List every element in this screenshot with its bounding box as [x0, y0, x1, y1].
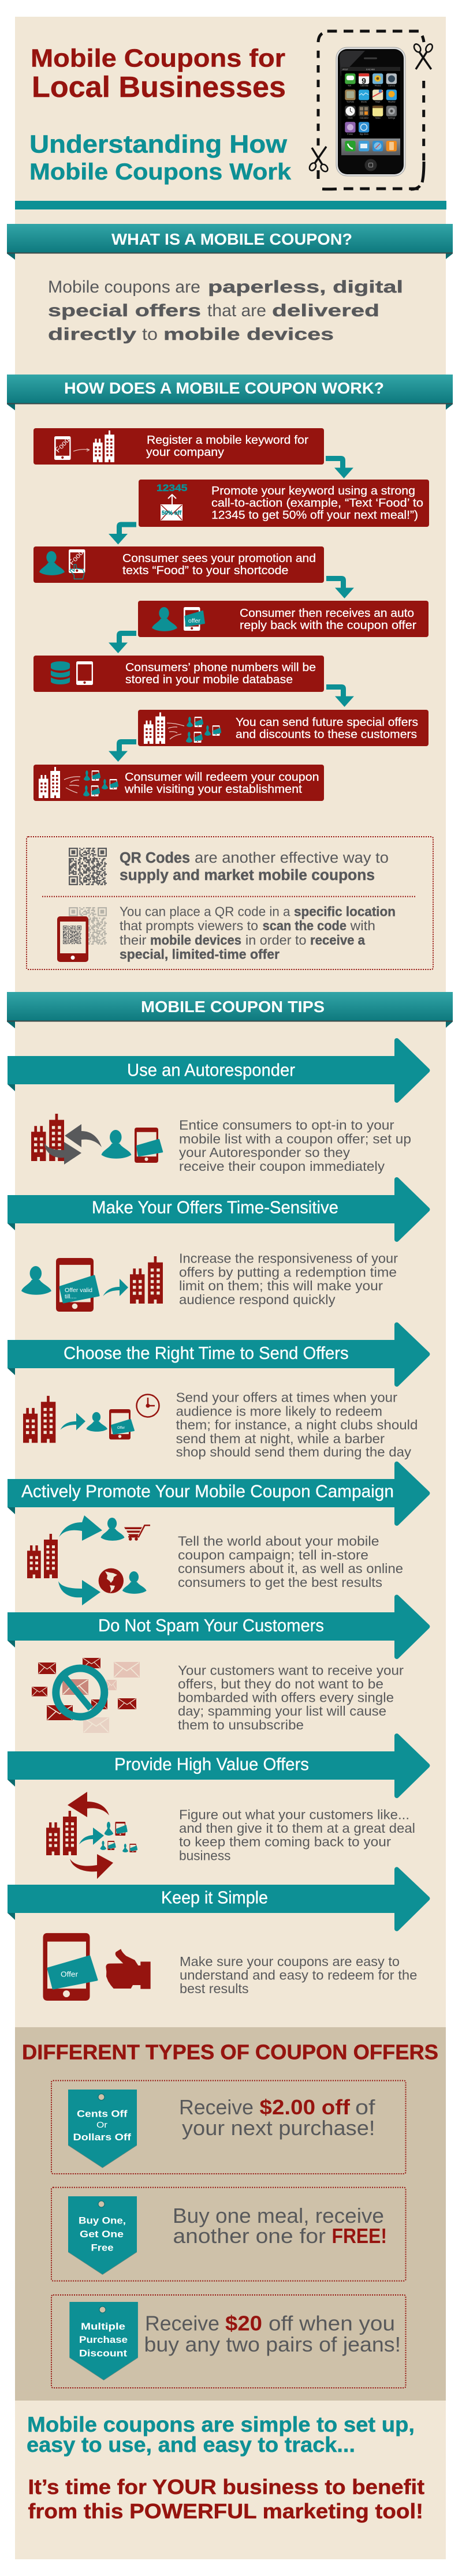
icon: scissors lower left	[308, 147, 329, 173]
ribbon: what is a mobile coupon	[7, 224, 453, 260]
step 7: while visiting your establishment	[124, 782, 302, 796]
text block: QR code placement: specific location	[294, 904, 396, 919]
banner arrow: provide high value offers	[8, 1736, 427, 1796]
text block: QR codes intro: are another effective way to	[195, 850, 389, 866]
step 3: Consumer sees your promotion and	[122, 552, 316, 565]
icon: timed offer with clock	[23, 1394, 159, 1443]
step 4: reply back with the coupon offer	[240, 619, 416, 632]
step 1	[33, 428, 324, 465]
text: two dollars off: of	[355, 2095, 376, 2119]
text block: actively promote: coupon campaign; tell in-store	[178, 1548, 368, 1563]
tag: buy one get one: Buy One,	[79, 2216, 126, 2226]
text: twenty dollars off: off when you	[269, 2312, 395, 2335]
text block: QR code placement: in order to	[245, 933, 307, 948]
icon: consumer receives offer	[152, 607, 204, 631]
step 2: Promote your keyword using a strong	[211, 484, 415, 497]
icon: smartphone	[336, 47, 405, 176]
icon: simple offer and thumbs up	[43, 1933, 151, 2001]
icon: smartphone: Clock	[348, 117, 353, 119]
icon: smartphone: Weather	[388, 100, 396, 103]
text block: right time: Send your offers at times when your	[176, 1390, 397, 1405]
text: buy one meal: Buy one meal, receive	[173, 2204, 384, 2227]
text block: keep it simple: understand and easy to redeem for the	[180, 1968, 417, 1983]
step 7	[33, 765, 324, 801]
text block: QR code placement	[120, 904, 396, 961]
closing text: simple to set up	[27, 2413, 415, 2457]
icon: shortcode envelope	[157, 482, 187, 521]
ribbon: mobile coupon tips: MOBILE COUPON TIPS	[141, 998, 325, 1016]
icon: time-limited offer: Offer valid	[65, 1287, 92, 1294]
ribbon: what is a mobile coupon: WHAT IS A MOBILE COUPON?	[111, 230, 352, 248]
tag: multiple purchase discount: Discount	[79, 2349, 128, 2359]
icon: smartphone: Maps	[375, 100, 381, 103]
step 3	[33, 546, 324, 583]
ribbon: how does a mobile coupon work: HOW DOES A MOBILE COUPON WORK?	[64, 379, 384, 397]
arrow: step 2 to 3	[109, 522, 136, 545]
text block: mobile coupon definition: that are	[207, 301, 266, 320]
icon: smartphone: AT&T	[342, 68, 348, 70]
icon: autoresponder exchange	[31, 1114, 162, 1165]
text block: autoresponder: mobile list with a coupon offer; set up	[179, 1131, 411, 1146]
icon: consumer receives offer: offer	[188, 617, 200, 624]
icon: shortcode envelope: 12345	[157, 482, 187, 493]
icon: thumbs up	[106, 1949, 151, 1989]
tag: buy one get one	[68, 2196, 137, 2275]
text block: right time: them; for instance, a night clubs should	[176, 1417, 418, 1432]
text block: mobile coupon definition: delivered	[272, 301, 379, 320]
icon: customers visit business	[39, 767, 118, 798]
text block: QR code placement: their	[120, 933, 147, 948]
text block: actively promote: Tell the world about your mobile	[178, 1534, 379, 1549]
dashed coupon cut line with scissors	[308, 31, 434, 189]
step 2: 12345 to get 50% off your next meal!”)	[211, 508, 418, 522]
banner arrow: keep it simple: Keep it Simple	[161, 1888, 268, 1907]
step 3: texts “Food” to your shortcode	[122, 564, 289, 577]
text: twenty dollars off	[144, 2312, 401, 2356]
text block: autoresponder: Entice consumers to opt-in to your	[179, 1118, 394, 1133]
icon: consumer texting: Food	[67, 548, 85, 567]
panel: different types of coupon offers	[15, 2027, 446, 2401]
arrow: step 5 to 6	[326, 684, 354, 707]
icon: timed offer with clock: Offer	[117, 1426, 125, 1430]
step 1: Register a mobile keyword for	[147, 433, 308, 447]
icon: smartphone: Photos	[375, 84, 381, 87]
text block: autoresponder: your Autoresponder so they	[179, 1145, 350, 1160]
text: two dollars off: Receive	[179, 2095, 254, 2119]
text block: QR code placement: mobile devices	[150, 933, 241, 948]
arrow: step 6 to 7	[109, 739, 136, 762]
step 5: Consumers’ phone numbers will be	[125, 661, 316, 674]
offer: buy one get one free	[51, 2188, 405, 2281]
text block: QR codes intro	[120, 850, 389, 883]
text block: mobile coupon definition: mobile devices	[163, 325, 334, 344]
text block: keep it simple: Make sure your coupons are easy to	[180, 1954, 400, 1969]
step 4: Consumer then receives an auto	[240, 606, 414, 620]
banner arrow: actively promote: Actively Promote Your Mobile Coupon Campaign	[21, 1482, 394, 1502]
step 2	[139, 480, 429, 527]
text block: high value offers: Figure out what your customers like...	[179, 1807, 409, 1822]
icon: smartphone: iTunes	[347, 133, 353, 135]
text block: autoresponder: receive their coupon immediately	[179, 1159, 385, 1174]
text block: actively promote	[178, 1534, 403, 1590]
text block: time-sensitive: offers by putting a redemption time	[179, 1265, 397, 1280]
icon: smartphone: Notes	[375, 117, 381, 119]
icon: time-limited offer: till....	[65, 1294, 77, 1300]
icon: smartphone: Camera	[388, 84, 395, 87]
panel: QR codes	[27, 837, 433, 969]
text block: do not spam: bombarded with offers every single	[178, 1690, 394, 1705]
icon: smartphone: 9:42 AM	[366, 68, 375, 70]
step 5: stored in your mobile database	[125, 673, 293, 686]
tag: cents off: Cents Off	[77, 2109, 128, 2119]
text block: mobile coupon definition: directly	[48, 325, 136, 344]
banner arrow: choose the right time	[8, 1325, 427, 1384]
icon: smartphone: App Store	[360, 133, 368, 135]
text block: time-sensitive: limit on them; this will make your	[179, 1278, 383, 1293]
icon: high value offer cycle	[46, 1792, 137, 1879]
ribbon: mobile coupon tips	[7, 992, 453, 1028]
text block: mobile coupon definition: to	[142, 325, 158, 344]
heading: coupon types: DIFFERENT TYPES OF COUPON OFFERS	[22, 2040, 438, 2064]
banner arrow: make your offers time-sensitive	[8, 1180, 427, 1240]
icon: business sends offers to customers	[144, 712, 221, 744]
banner arrow: provide high value offers: Provide High Value Offers	[114, 1755, 309, 1774]
text block: actively promote: consumers to get the best results	[178, 1575, 382, 1590]
icon: smartphone: Settings	[388, 117, 396, 119]
banner arrow: keep it simple	[8, 1869, 427, 1929]
tag: multiple purchase discount: Multiple	[81, 2322, 125, 2332]
closing text: simple to set up: easy to use, and easy to track...	[27, 2433, 355, 2457]
banner arrow: do not spam: Do Not Spam Your Customers	[98, 1616, 324, 1635]
offer: cents off	[51, 2081, 405, 2174]
text block: actively promote: consumers about it, as well as online	[178, 1561, 403, 1576]
banner arrow: actively promote	[8, 1464, 427, 1523]
text block: high value offers: business	[179, 1848, 231, 1863]
tag: buy one get one: Free	[91, 2243, 113, 2253]
icon: phone to business: Food	[53, 436, 71, 454]
icon: time-limited offer	[21, 1256, 163, 1312]
text: buy one meal	[173, 2204, 387, 2248]
icon: smartphone: Stocks	[361, 100, 367, 103]
text block: QR code placement: You can place a QR code in a	[120, 904, 290, 919]
tag: cents off: Dollars Off	[73, 2132, 132, 2143]
closing text: call to action	[28, 2475, 424, 2523]
text block: QR code placement: scan the code	[263, 918, 346, 933]
text block: mobile coupon definition: paperless, digital	[208, 278, 403, 297]
tag: multiple purchase discount: Purchase	[79, 2335, 128, 2345]
text block: do not spam	[178, 1663, 404, 1732]
text block: mobile coupon definition: Mobile coupons are	[48, 278, 200, 297]
icon: QR code	[69, 848, 107, 885]
text block: QR codes intro: supply and market mobile coupons	[120, 867, 375, 883]
subtitle: Mobile Coupons Work	[29, 159, 292, 185]
offer: multiple purchase discount	[51, 2295, 405, 2388]
text block: high value offers: and then give it to them at a great deal	[179, 1821, 415, 1836]
text block: mobile coupon definition	[48, 278, 403, 344]
closing text: call to action: It’s time for YOUR business to benefit	[28, 2475, 424, 2499]
text block: time-sensitive: Increase the responsiveness of your	[179, 1251, 398, 1266]
text block: autoresponder	[179, 1118, 411, 1174]
text block: right time: shop should send them during the day	[176, 1444, 411, 1459]
text block: keep it simple: best results	[180, 1981, 249, 1996]
title: Mobile Coupons for	[31, 44, 285, 73]
subtitle	[29, 130, 292, 185]
icon: phone to business	[53, 430, 114, 462]
text block: high value offers: to keep them coming back to your	[179, 1834, 391, 1849]
step 4	[138, 601, 429, 637]
icon: no spam envelopes	[32, 1658, 140, 1733]
icon: globe	[99, 1568, 124, 1593]
text block: do not spam: day; spamming your list will cause	[178, 1703, 386, 1718]
arrow: step 3 to 4	[326, 576, 354, 598]
text block: do not spam: offers, but they do not want to be	[178, 1676, 383, 1691]
text block: time-sensitive: audience respond quickly	[179, 1292, 336, 1307]
text block: mobile coupon definition: special offers	[48, 301, 201, 320]
icon: smartphone: Calendar	[360, 84, 369, 87]
icon: smartphone: 9	[362, 76, 366, 85]
step 6: and discounts to these customers	[236, 728, 417, 741]
icon: smartphone: Text	[348, 84, 351, 87]
text: two dollars off: $2.00 off	[260, 2095, 351, 2119]
text block: time-sensitive	[179, 1251, 398, 1307]
text: two dollars off	[179, 2095, 376, 2140]
banner arrow: choose the right time: Choose the Right Time to Send Offers	[64, 1343, 349, 1363]
step 6: You can send future special offers	[236, 716, 418, 729]
text block: do not spam: Your customers want to receive your	[178, 1663, 404, 1678]
tag: multiple purchase discount	[69, 2302, 138, 2380]
icon: scissors top right	[413, 43, 434, 69]
text block: right time	[176, 1390, 418, 1459]
icon: smartphone: YouTube	[346, 100, 354, 103]
closing text: simple to set up: Mobile coupons are simple to set up,	[27, 2413, 415, 2436]
step 1: your company	[146, 445, 225, 459]
icon: consumer texting	[39, 548, 85, 579]
step 7: Consumer will redeem your coupon	[125, 770, 319, 784]
text block: QR code placement: that prompts viewers to	[120, 918, 258, 933]
step 2: call-to-action (example, “Text ‘Food’ to	[211, 496, 423, 510]
arrow: step 1 to 2	[326, 456, 353, 478]
arrow: step 4 to 5	[109, 631, 136, 653]
text block: do not spam: them to unsubscribe	[178, 1717, 304, 1732]
subtitle: Understanding How	[29, 130, 288, 158]
text block: QR code placement: with	[350, 918, 375, 933]
icon: shopping cart	[124, 1525, 150, 1541]
tag: cents off	[68, 2090, 137, 2168]
ribbon: how does a mobile coupon work	[7, 375, 453, 410]
text block: QR code placement: special, limited-time offer	[120, 946, 280, 961]
icon: promote in-store and online	[27, 1515, 150, 1605]
tag: buy one get one: Get One	[80, 2229, 124, 2240]
text: twenty dollars off: buy any two pairs of jeans!	[144, 2332, 401, 2356]
icon: phone scanning QR code	[57, 907, 107, 962]
text: buy one meal: FREE!	[331, 2224, 387, 2248]
text block: high value offers	[179, 1807, 415, 1863]
title	[31, 44, 286, 103]
icon: smartphone: Calculator	[360, 117, 369, 119]
text block: right time: audience is more likely to redeem	[176, 1404, 382, 1419]
step 6	[138, 710, 429, 746]
title: Local Businesses	[32, 70, 286, 103]
banner arrow: make your offers time-sensitive: Make Your Offers Time-Sensitive	[92, 1198, 338, 1218]
tag: cents off: Or	[96, 2120, 107, 2130]
text: buy one meal: another one for	[173, 2224, 326, 2248]
banner arrow: do not spam	[8, 1597, 427, 1657]
banner arrow: use an autoresponder	[8, 1040, 427, 1100]
text block: QR code placement: receive a	[310, 933, 366, 948]
text block: keep it simple	[180, 1954, 417, 1996]
text block: right time: send them at night, while a barber	[176, 1431, 385, 1446]
step 5	[33, 656, 324, 692]
text: two dollars off: your next purchase!	[182, 2116, 375, 2140]
header divider bar	[15, 201, 446, 209]
icon: simple offer and thumbs up: Offer	[61, 1970, 79, 1979]
text block: QR codes intro: QR Codes	[120, 850, 190, 866]
icon: database and phone	[51, 661, 93, 685]
banner arrow: use an autoresponder: Use an Autoresponder	[127, 1060, 295, 1080]
icon: shortcode envelope: 50% off	[162, 510, 181, 516]
text: twenty dollars off: $20	[225, 2312, 262, 2335]
closing text: call to action: from this POWERFUL marketing tool!	[28, 2499, 423, 2523]
text: twenty dollars off: Receive	[145, 2312, 219, 2335]
